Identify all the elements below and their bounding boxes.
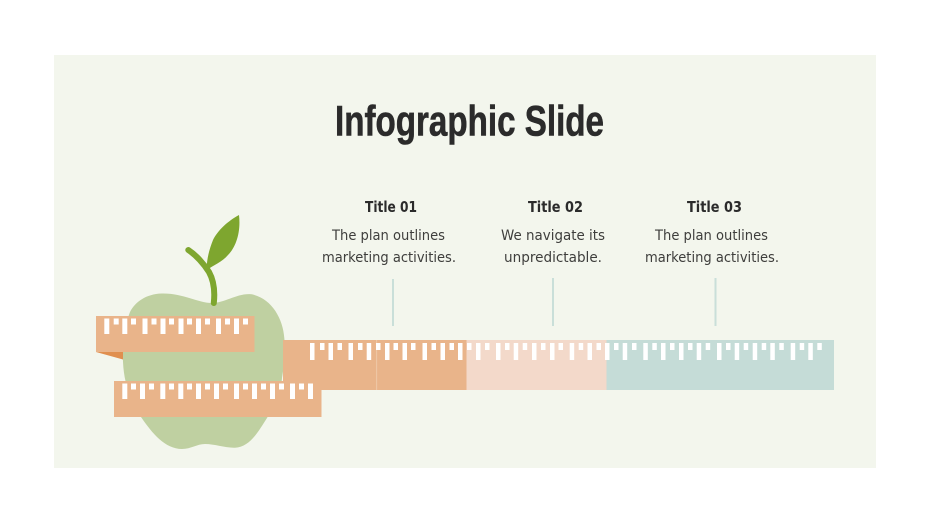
- band ticks: [122, 384, 313, 399]
- text block: title 02: [501, 198, 605, 266]
- connector line 1: [392, 279, 394, 326]
- text block: title 03: Title 03: [687, 198, 742, 216]
- band body: [114, 381, 322, 417]
- band ticks: [104, 318, 248, 334]
- ruler fold: [96, 352, 123, 360]
- ruler seam: [375, 340, 378, 390]
- text block: title 03: marketing activities.: [645, 250, 779, 266]
- text block: title 02: unpredictable.: [504, 250, 602, 266]
- ruler segment: teal: [606, 340, 834, 390]
- text block: title 02: We navigate its: [501, 228, 605, 244]
- text block: title 01: The plan outlines: [331, 228, 445, 244]
- ruler ticks: [310, 343, 822, 360]
- text block: title 01: marketing activities.: [322, 250, 456, 266]
- text block: title 02: Title 02: [528, 198, 583, 216]
- ruler segment: orange: [283, 340, 466, 390]
- apple body: [123, 293, 285, 449]
- connector line 3: [714, 278, 716, 326]
- text block: title 03: The plan outlines: [654, 228, 768, 244]
- apple stem: [188, 250, 214, 303]
- ruler wrap: top band: [96, 316, 254, 360]
- text block: title 01: Title 01: [365, 198, 417, 216]
- title: Infographic Slide: [335, 98, 604, 146]
- long ruler: [283, 340, 834, 390]
- band body: [96, 316, 254, 352]
- icon: apple: [123, 215, 285, 449]
- text block: title 01: [322, 198, 456, 266]
- connector line 2: [552, 278, 554, 326]
- ruler segment: pink: [466, 340, 606, 390]
- ruler wrap: bottom band: [114, 381, 322, 417]
- apple leaf: [207, 215, 239, 270]
- panel: background: [54, 55, 876, 468]
- text block: title 03: [645, 198, 779, 266]
